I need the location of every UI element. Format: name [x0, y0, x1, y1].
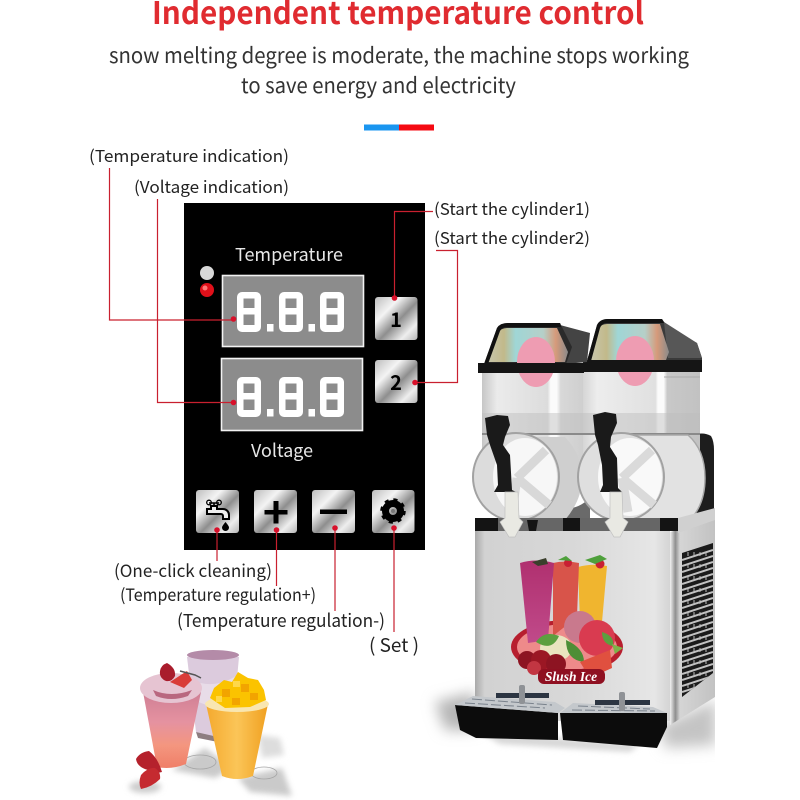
callout labels	[89, 143, 590, 658]
right cylinder extension	[630, 435, 705, 522]
machine floor shadow	[435, 692, 716, 752]
left lid	[560, 325, 590, 364]
button 1: 1	[390, 304, 402, 333]
callout line: temperature regulation plus	[274, 527, 279, 586]
callout line: one-click cleaning	[214, 527, 220, 561]
right lid	[587, 319, 702, 360]
subtitle text block: snow melting degree is moderate, the machine stops working	[109, 39, 689, 70]
button: minus	[312, 490, 355, 533]
side vents	[682, 543, 713, 697]
dark cylinder shadow	[566, 502, 590, 518]
button: settings gear	[372, 490, 414, 533]
callout labels: (Temperature indication)	[89, 143, 289, 167]
fruit pile	[518, 611, 623, 678]
right drip tray	[560, 692, 667, 748]
Slush Ice label: Slush Ice	[545, 669, 597, 684]
subtitle text block: to save energy and electricity	[241, 69, 516, 100]
strawberries	[136, 751, 162, 789]
left drip tray	[455, 685, 565, 740]
callout labels: (Voltage indication)	[134, 174, 289, 198]
left nozzle	[500, 492, 523, 537]
subtitle text block	[109, 39, 689, 100]
callout labels: (One-click cleaning)	[114, 557, 272, 582]
machine front panel	[475, 531, 670, 721]
panel heading: Temperature: Temperature	[235, 241, 343, 267]
right hopper	[583, 319, 702, 454]
button 2: 2	[390, 367, 402, 396]
drinks illustration	[129, 650, 292, 796]
callout labels: (Temperature regulation+)	[120, 581, 316, 606]
callout labels: (Start the cylinder2)	[434, 225, 590, 249]
yellow cup	[205, 672, 269, 779]
machine rear bracket	[696, 434, 714, 514]
black collar	[475, 508, 715, 533]
purple cup	[187, 650, 239, 742]
callout line: start cylinder 1	[392, 212, 433, 301]
right dispenser handle	[593, 412, 622, 492]
callout line: voltage indication	[158, 199, 236, 405]
sticker red oval	[511, 620, 623, 669]
right cylinder	[578, 433, 664, 521]
button: faucet cleaning	[196, 490, 239, 533]
callout line: temperature regulation minus	[332, 525, 338, 611]
left cylinder	[473, 433, 559, 521]
purple smoothie	[520, 560, 554, 643]
left cylinder extension	[534, 437, 580, 518]
smoothie garnish	[532, 555, 607, 568]
panel heading: Voltage: Voltage	[251, 437, 313, 463]
red smoothie	[553, 562, 579, 636]
button 1	[375, 297, 418, 340]
machine base steel side	[670, 519, 715, 725]
callout line: temperature indication	[110, 168, 236, 322]
button 2	[375, 360, 418, 403]
voltage display	[222, 358, 362, 430]
slush machine	[435, 319, 716, 752]
callout line: start cylinder 2	[412, 250, 458, 385]
callout labels: (Start the cylinder1)	[434, 196, 590, 220]
callout labels: (Temperature regulation-)	[177, 607, 385, 633]
button: plus	[254, 490, 297, 533]
indicator lights	[200, 266, 214, 297]
Slush Ice sticker	[511, 555, 623, 684]
left hopper	[478, 323, 590, 472]
left dispenser handle	[485, 415, 516, 492]
right nozzle	[605, 492, 628, 537]
temperature display	[222, 276, 364, 346]
accent bar: blue and red	[364, 124, 434, 130]
pink cup	[140, 663, 202, 768]
control panel	[184, 203, 425, 550]
callout line: set	[391, 525, 397, 632]
yellow smoothie	[578, 565, 607, 622]
callout labels: ( Set )	[369, 631, 419, 658]
cup shadows	[129, 735, 292, 796]
